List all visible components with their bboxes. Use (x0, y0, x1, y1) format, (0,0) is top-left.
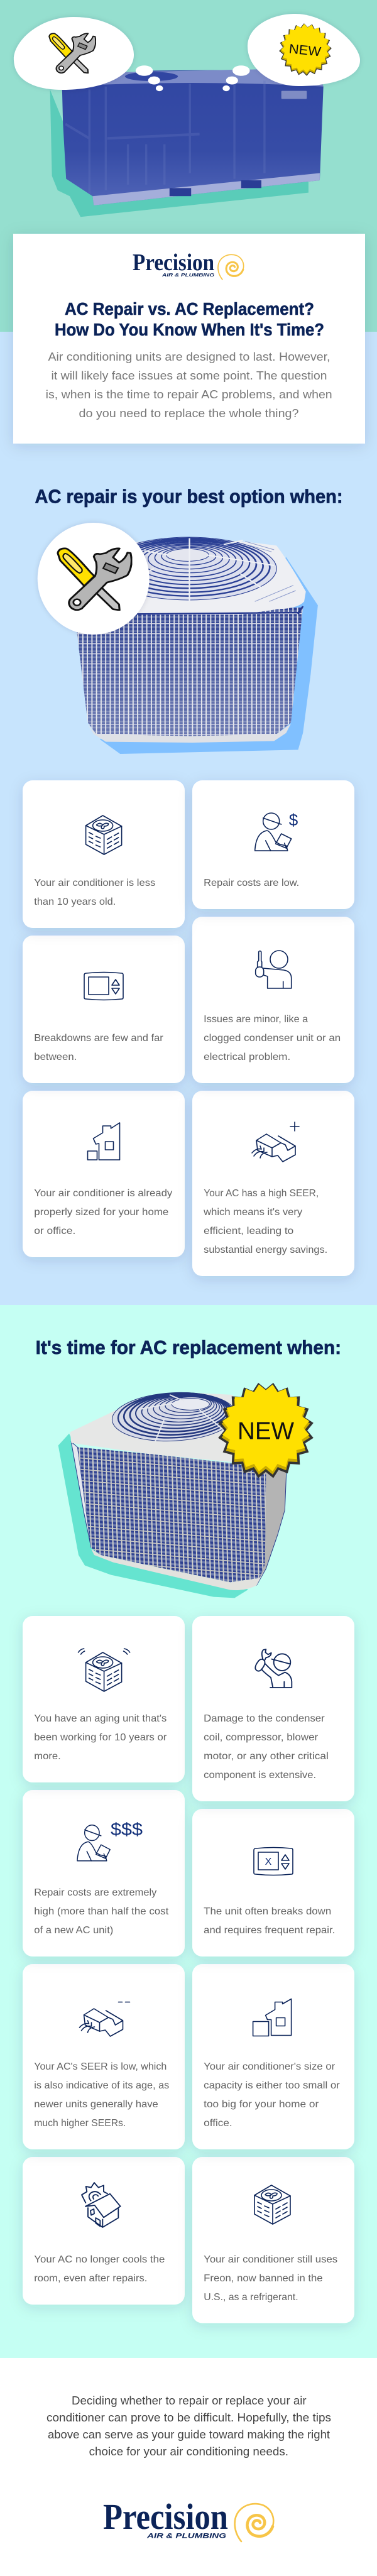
logo: Precision Air and Plumbing: Precision (133, 249, 214, 276)
card: already properly sized (23, 1091, 185, 1257)
card text: Damage to the condenser (204, 1713, 325, 1724)
card: low SEER (23, 1964, 185, 2149)
icon: vibrating AC unit (79, 1649, 130, 1691)
card text: much higher SEERs. (34, 2118, 126, 2129)
card text (204, 1713, 329, 1781)
card: aging unit (23, 1616, 185, 1782)
fan grille rings (101, 537, 276, 600)
thought cloud right with NEW badge (248, 14, 360, 86)
icon: broken unit with minus signs (79, 2002, 129, 2036)
base band (91, 1549, 266, 1590)
icon: technician with three dollar signs (77, 1820, 143, 1861)
card text: component is extensive. (204, 1770, 316, 1781)
card text: clogged condenser unit or an (204, 1033, 341, 1044)
card text: is also indicative of its age, as (34, 2080, 169, 2091)
section background: footer white (0, 2358, 377, 2576)
icon: thermostat with X (254, 1847, 293, 1875)
icon: AC unit (86, 816, 122, 854)
logo: footer Precision Air and Plumbing: AIR & PLUMBING (146, 2533, 227, 2540)
card text: high (more than half the cost (34, 1906, 169, 1917)
icon: house and oversized box (253, 1999, 292, 2036)
AC top band (62, 68, 324, 87)
card text (204, 2061, 340, 2129)
card text: Your air conditioner is less (34, 878, 155, 888)
grille front (77, 1447, 266, 1582)
card text: between. (34, 1052, 77, 1062)
card: wrong size (192, 1964, 354, 2149)
card text: efficient, leading to (204, 1226, 293, 1236)
card text: motor, or any other critical (204, 1751, 329, 1762)
icon: screwdriver and wrench small (48, 33, 96, 74)
card text: room, even after repairs. (34, 2273, 147, 2284)
card text: Repair costs are low. (204, 878, 299, 888)
lid (70, 1392, 260, 1462)
AC panel seams (65, 81, 265, 194)
white circle (38, 523, 150, 635)
fan hub (167, 548, 209, 561)
card: breakdowns few (23, 936, 185, 1083)
card text: too big for your home or (204, 2099, 319, 2110)
thought cloud left with tools (14, 17, 134, 90)
lid front edge (134, 606, 303, 614)
intro paragraph: it will likely face issues at some point. The question (52, 369, 327, 382)
intro paragraph: Air conditioning units are designed to last. However, (48, 350, 331, 363)
cloud shape left (14, 17, 134, 90)
icon: technician with dollar sign (255, 810, 298, 851)
right side panel (256, 1468, 287, 1585)
card text: Freon, now banned in the (204, 2273, 323, 2284)
card text: Your AC's SEER is low, which (34, 2061, 167, 2072)
mint offset shadow (58, 1434, 248, 1598)
icon: AC unit (254, 2185, 290, 2224)
AC blue body (62, 69, 324, 205)
card text (34, 1033, 163, 1062)
fan spokes (138, 1395, 224, 1442)
card text (34, 1188, 172, 1236)
icon: person holding screwdriver (256, 951, 292, 988)
card text (34, 878, 155, 907)
AC base slot right (241, 180, 261, 188)
section background: replacement mint (0, 1305, 377, 2358)
closing paragraph: choice for your air conditioning needs. (89, 2445, 288, 2458)
closing paragraph: Deciding whether to repair or replace your air (72, 2394, 307, 2407)
illustration: condenser unit, angled view (58, 1390, 287, 1598)
card: issues minor (192, 917, 354, 1083)
AC nameplate (281, 91, 307, 99)
closing paragraph: conditioner can prove to be difficult. Hopefully, the tips (46, 2411, 331, 2424)
icon: screwdriver and wrench (57, 548, 132, 611)
card text (34, 2061, 169, 2129)
card: repair costs high (23, 1790, 185, 1957)
lid (134, 539, 306, 614)
card text: You have an aging unit that's (34, 1713, 167, 1724)
card text: Your air conditioner is already (34, 1188, 172, 1199)
icon: house and small box (88, 1123, 119, 1160)
intro paragraph: is, when is the time to repair AC problems, and when (46, 388, 332, 401)
card text: or office. (34, 1226, 75, 1236)
icon: house under sun (82, 2183, 121, 2227)
card text: The unit often breaks down (204, 1906, 331, 1917)
card text: Your air conditioner's size or (204, 2061, 336, 2072)
AC teal offset shadow (50, 89, 309, 217)
fan spokes (134, 538, 274, 602)
thought bubble dots right (222, 65, 250, 91)
card text: more. (34, 1751, 61, 1762)
card text: newer units generally have (34, 2099, 158, 2110)
closing paragraph: above can serve as your guide toward making the right (48, 2428, 330, 2441)
card: repair costs low (192, 780, 354, 909)
section background: hero teal (0, 0, 377, 332)
card text: U.S., as a refrigerant. (204, 2292, 298, 2303)
card text: Issues are minor, like a (204, 1014, 308, 1025)
fan hub (172, 1399, 209, 1410)
card text: substantial energy savings. (204, 1245, 327, 1255)
card text: and requires frequent repair. (204, 1925, 335, 1936)
badge: NEW small (277, 21, 334, 78)
heading: replacement: It's time for AC replacement when: (36, 1336, 341, 1358)
card: AC no longer cools (23, 2157, 185, 2305)
card text: which means it's very (203, 1207, 302, 1218)
panel: intro (13, 234, 365, 444)
card text: capacity is either too small or (204, 2080, 340, 2091)
thought bubble dots left (136, 65, 163, 91)
intro card background (13, 234, 365, 444)
card text (34, 1887, 169, 1936)
card text (34, 1713, 167, 1762)
card text: electrical problem. (204, 1052, 290, 1062)
cloud shape right (248, 14, 360, 86)
badge: NEW small: NEW (288, 41, 322, 60)
card: still uses Freon (192, 2157, 354, 2323)
icon: technician with three dollar signs: $$$ (111, 1820, 143, 1839)
left side panel (71, 1442, 91, 1547)
card text: Repair costs are extremely (34, 1887, 156, 1898)
card text (204, 1906, 335, 1936)
card text (34, 2254, 165, 2284)
section background: repair blue (0, 332, 377, 1305)
icon: technician with dollar sign: $ (289, 810, 298, 829)
heading: repair: AC repair is your best option when: (35, 486, 343, 508)
card text: coil, compressor, blower (204, 1732, 319, 1743)
illustration: condenser unit, front view (77, 537, 318, 754)
card text: of a new AC unit) (34, 1925, 113, 1936)
card text: properly sized for your home (34, 1207, 168, 1218)
title: How Do You Know When It's Time? (55, 320, 324, 339)
card: critical component damage (192, 1616, 354, 1801)
AC top opening (125, 72, 178, 81)
title (55, 299, 324, 339)
icon: thermostat (84, 973, 123, 1000)
blue offset shadow (100, 557, 318, 754)
card text (203, 1188, 327, 1255)
card text: than 10 years old. (34, 897, 116, 907)
logo: Precision Air and Plumbing: AIR & PLUMBING (161, 272, 214, 278)
hero illustration: packaged AC unit (50, 65, 324, 217)
grille front light overlay (77, 608, 303, 737)
icon: thermostat with X: X (265, 1857, 272, 1867)
card text (204, 2254, 337, 2303)
card: less than 10 years (23, 780, 185, 928)
AC base strip (92, 173, 320, 205)
badge: NEW large: NEW (238, 1418, 294, 1445)
card text: Your air conditioner still uses (204, 2254, 337, 2265)
card text: been working for 10 years or (34, 1732, 167, 1743)
logo: footer Precision Air and Plumbing: Precision (103, 2496, 228, 2537)
card text: Your AC no longer cools the (34, 2254, 165, 2265)
card text: Breakdowns are few and far (34, 1033, 163, 1044)
card: frequent breakdowns (192, 1809, 354, 1957)
fan rings (111, 1390, 237, 1444)
title: AC Repair vs. AC Replacement? (65, 299, 314, 319)
card: high SEER (192, 1091, 354, 1276)
intro paragraph (46, 350, 332, 420)
icon: broken unit with plus (252, 1122, 299, 1162)
card text: office. (204, 2118, 232, 2129)
badge: NEW large (220, 1385, 312, 1476)
card text: Your AC has a high SEER, (204, 1188, 319, 1199)
icon: technician with wrench (255, 1649, 292, 1688)
intro paragraph: do you need to replace the whole thing? (79, 407, 299, 420)
card text (204, 1014, 341, 1062)
AC base slot left (170, 188, 191, 196)
closing paragraph (46, 2394, 331, 2458)
base band (88, 724, 291, 743)
icon badge: tools in white circle (38, 523, 150, 635)
grille front (77, 608, 303, 737)
lid highlight lines (245, 542, 296, 601)
